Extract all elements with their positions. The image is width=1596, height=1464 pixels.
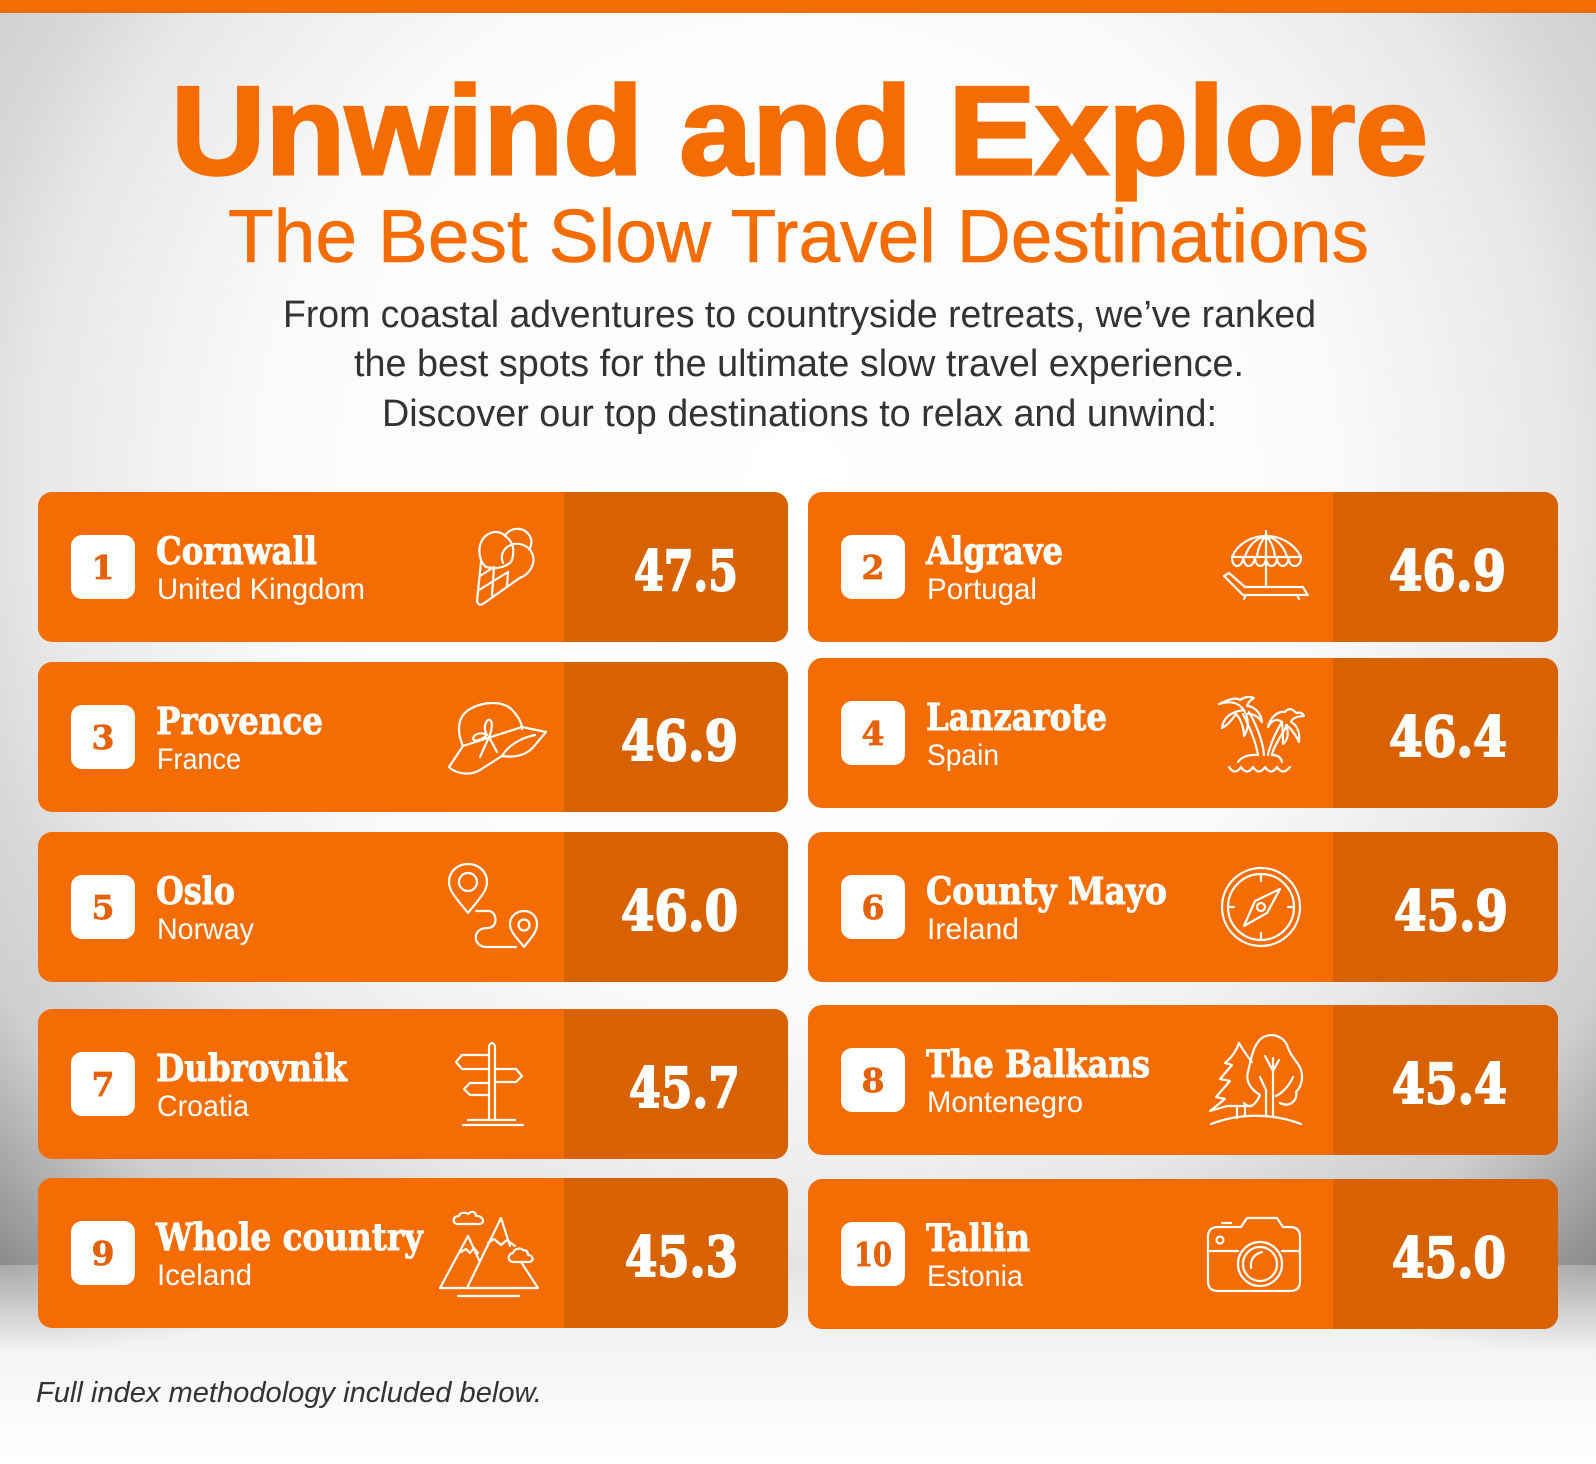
score: 46.9 xyxy=(621,708,738,773)
rank: 7 xyxy=(92,1065,114,1104)
country: Estonia xyxy=(927,1260,1023,1293)
score: 45.0 xyxy=(1392,1225,1506,1290)
rank: 5 xyxy=(92,888,114,927)
icon: forest trees xyxy=(1210,1035,1302,1124)
rank: 1 xyxy=(92,548,114,587)
name: Tallin xyxy=(926,1216,1030,1260)
country: Spain xyxy=(927,739,999,772)
score: 46.9 xyxy=(1389,538,1506,603)
footnote: Full index methodology included below. xyxy=(36,1377,542,1409)
score: 46.4 xyxy=(1389,704,1507,769)
subtitle: The Best Slow Travel Destinations xyxy=(228,194,1369,278)
name: Oslo xyxy=(156,869,235,913)
card 6: County Mayo xyxy=(808,832,1558,982)
icon: palm island xyxy=(1219,697,1304,772)
card 10: Tallin xyxy=(808,1179,1558,1329)
card 8: The Balkans xyxy=(808,1005,1558,1155)
card 4: Lanzarote xyxy=(808,658,1558,808)
card 5: Oslo xyxy=(38,832,788,982)
country: Iceland xyxy=(157,1259,252,1292)
rank: 10 xyxy=(854,1235,892,1274)
title: Unwind and Explore xyxy=(171,60,1428,201)
icon: ice cream xyxy=(477,529,533,605)
icon: camera xyxy=(1208,1218,1300,1291)
intro text: From coastal adventures to countryside retreats, we’ve ranked xyxy=(283,294,1316,336)
intro text: the best spots for the ultimate slow travel experience. xyxy=(354,343,1244,385)
rank: 4 xyxy=(862,714,884,753)
icon: sun hat xyxy=(449,703,546,774)
name: Algrave xyxy=(925,529,1063,573)
name: The Balkans xyxy=(926,1042,1150,1086)
card 9: Whole country xyxy=(38,1178,788,1328)
name: Whole country xyxy=(155,1215,424,1259)
country: Montenegro xyxy=(927,1086,1083,1119)
name: County Mayo xyxy=(926,869,1167,913)
rank: 2 xyxy=(862,548,884,587)
rank: 9 xyxy=(92,1234,114,1273)
country: France xyxy=(157,743,241,776)
name: Provence xyxy=(156,699,323,743)
icon: signpost xyxy=(456,1043,523,1125)
score: 45.9 xyxy=(1394,878,1508,943)
icon: compass xyxy=(1222,868,1300,946)
card 7: Dubrovnik xyxy=(38,1009,788,1159)
name: Cornwall xyxy=(156,529,317,573)
icon: route with map pins xyxy=(449,864,537,947)
country: Ireland xyxy=(927,913,1019,946)
icon: mountains and clouds xyxy=(440,1212,538,1296)
rank: 8 xyxy=(862,1061,884,1100)
score: 45.3 xyxy=(625,1224,738,1289)
intro text: Discover our top destinations to relax and unwind: xyxy=(382,393,1217,435)
intro text xyxy=(283,294,1316,435)
country: United Kingdom xyxy=(157,573,365,606)
name: Lanzarote xyxy=(926,695,1107,739)
card 1: Cornwall xyxy=(38,492,788,642)
score: 45.4 xyxy=(1392,1051,1507,1116)
score: 45.7 xyxy=(629,1055,740,1120)
card 2: Algrave xyxy=(808,492,1558,642)
score: 46.0 xyxy=(621,878,738,943)
name: Dubrovnik xyxy=(156,1046,348,1090)
score: 47.5 xyxy=(634,538,738,603)
icon: beach umbrella and lounger xyxy=(1224,531,1308,599)
rank: 6 xyxy=(862,888,884,927)
rank: 3 xyxy=(92,718,114,757)
country: Portugal xyxy=(927,573,1037,606)
card 3: Provence xyxy=(38,662,788,812)
country: Norway xyxy=(157,913,254,946)
country: Croatia xyxy=(157,1090,249,1123)
